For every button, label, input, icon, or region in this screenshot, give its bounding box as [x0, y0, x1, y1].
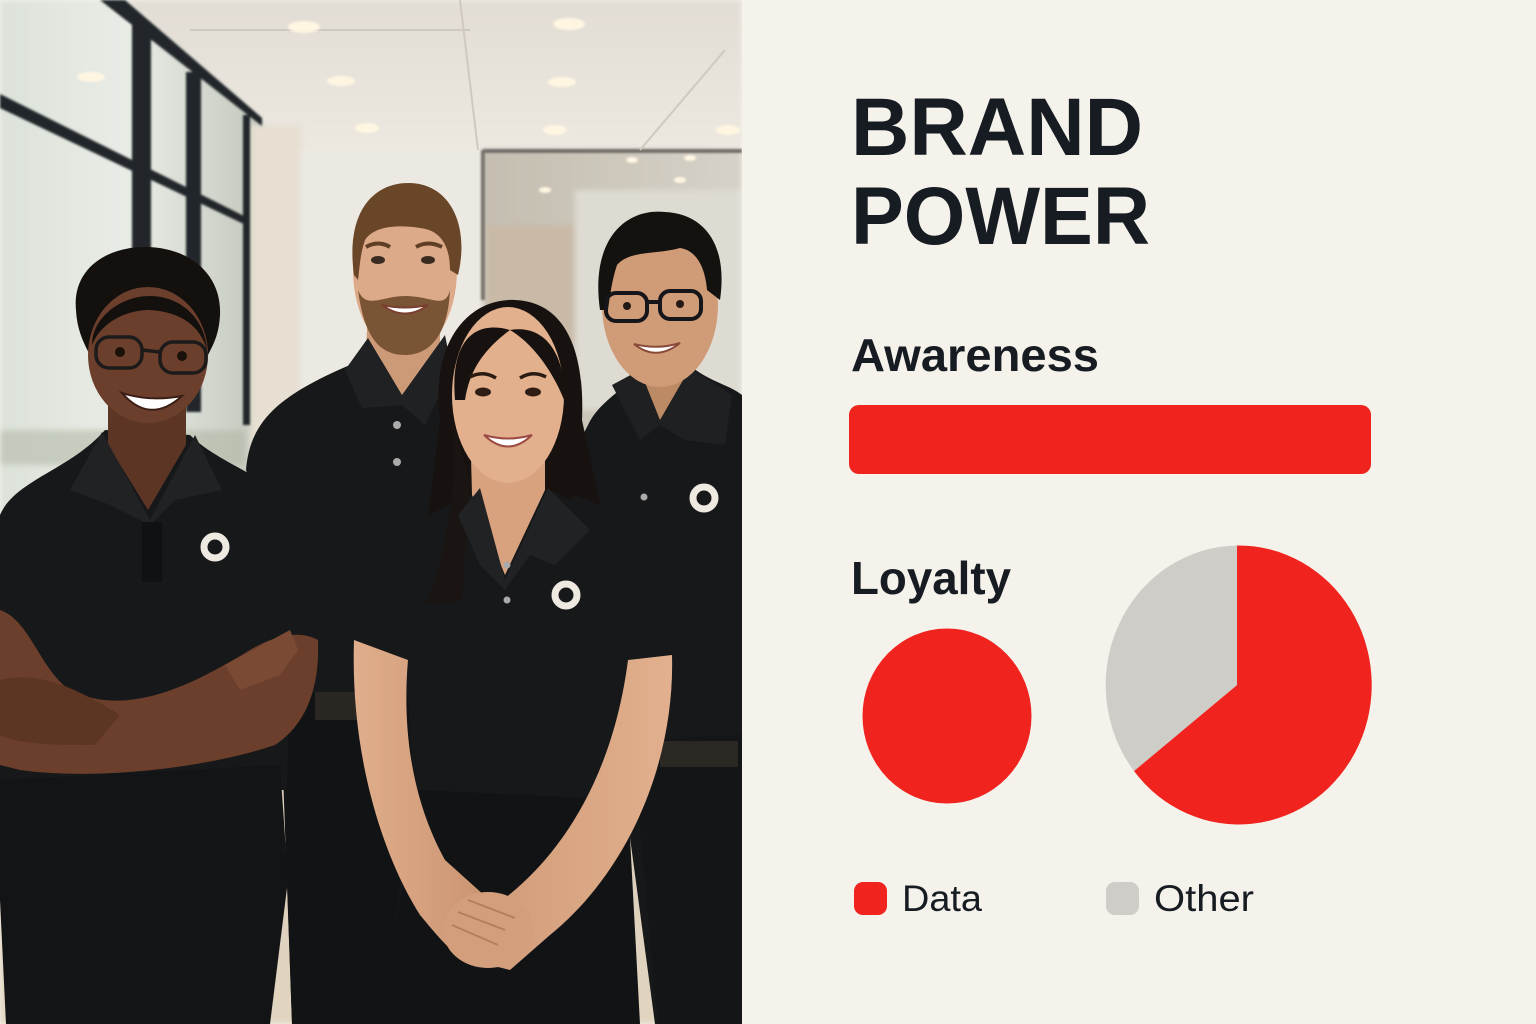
- office corridor background: [0, 0, 742, 1024]
- shirt logo: [555, 584, 577, 606]
- legend: other: [1106, 878, 1254, 919]
- shirt logo: [693, 487, 715, 509]
- crossed arms: [0, 610, 318, 774]
- title: [851, 82, 1150, 262]
- person: woman with glasses, left: [0, 247, 318, 1024]
- arms and clasped hands: [354, 640, 481, 947]
- legend: data: Data: [902, 878, 982, 919]
- heading: loyalty: Loyalty: [851, 552, 1011, 604]
- person: bearded man, back centre: [246, 183, 461, 1024]
- person: man with glasses, right: [560, 212, 742, 1024]
- ceiling lights: [77, 18, 740, 193]
- ceiling panel seams: [190, 0, 725, 150]
- window frames: [0, 0, 742, 425]
- title: BRAND: [851, 82, 1143, 173]
- chart: loyalty pie: [1106, 545, 1372, 824]
- shirt logo: [204, 536, 226, 558]
- heading: awareness: Awareness: [851, 329, 1099, 381]
- legend: data: [854, 878, 982, 919]
- photo: team of four in black polos in an office corridor: [0, 0, 742, 1024]
- legend: other: Other: [1154, 878, 1254, 919]
- person: woman with long hair, centre front: [350, 300, 682, 1024]
- title: POWER: [851, 171, 1150, 262]
- bar: awareness: [849, 405, 1371, 474]
- trousers: [380, 790, 640, 1024]
- right panel background: [742, 0, 1536, 1024]
- chart: solid red circle: [862, 628, 1032, 804]
